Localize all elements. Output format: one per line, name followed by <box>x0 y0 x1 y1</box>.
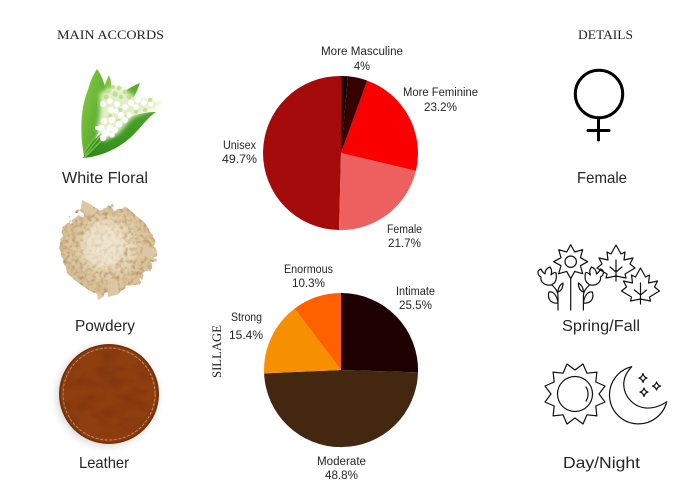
label: strong <box>229 312 263 342</box>
slice: intimate <box>341 293 418 372</box>
label: intimate <box>396 286 435 312</box>
slice: more feminine <box>341 81 418 171</box>
chart: sillage pie <box>264 293 418 447</box>
heading: main accords: MAIN ACCORDS <box>57 27 164 42</box>
label: more masculine <box>321 46 403 73</box>
accord: powdery image <box>60 200 157 300</box>
icon part: lower maple leaf <box>622 268 660 304</box>
label: day/night: Day/Night <box>563 455 641 472</box>
label: more masculine: More Masculine <box>321 46 403 58</box>
label: moderate: Moderate <box>317 456 366 468</box>
slice: female <box>339 153 416 230</box>
label: more masculine: 4% <box>354 61 370 73</box>
slice: strong <box>264 309 341 373</box>
label: white floral: White Floral <box>62 170 148 187</box>
accord: leather image <box>57 344 159 446</box>
axis label: sillage: SILLAGE <box>209 325 224 378</box>
label: intimate: 25.5% <box>399 300 432 312</box>
label: strong: 15.4% <box>229 330 263 342</box>
slice: more masculine <box>341 76 367 153</box>
icon part: sunflower <box>554 245 588 310</box>
label: female: Female <box>577 170 627 187</box>
label: moderate: 48.8% <box>325 470 358 482</box>
label: enormous: 10.3% <box>292 278 325 290</box>
icon part: sun <box>545 364 605 424</box>
slice: moderate <box>264 370 418 447</box>
label: female share <box>387 224 422 250</box>
slice: unisex <box>263 76 341 230</box>
label: female share: 21.7% <box>388 238 421 250</box>
label: leather: Leather <box>79 455 130 472</box>
heading: details: DETAILS <box>578 27 633 42</box>
chart: gender pie <box>263 76 418 230</box>
icon: female symbol <box>575 70 623 140</box>
label: unisex <box>222 140 257 166</box>
label: moderate <box>317 456 366 482</box>
label: more feminine: More Feminine <box>403 87 478 99</box>
accord: white floral image <box>81 69 162 158</box>
icon: flowers and maple leaves <box>538 245 660 310</box>
icon part: upper maple leaf <box>597 245 635 281</box>
label: powdery: Powdery <box>75 318 135 335</box>
slice: male <box>341 76 348 153</box>
label: enormous: Enormous <box>284 264 333 276</box>
label: spring/fall: Spring/Fall <box>562 318 640 335</box>
icon part: right tulip <box>578 267 603 310</box>
slice: enormous <box>295 293 341 370</box>
label: female share: Female <box>387 224 422 236</box>
label: intimate: Intimate <box>396 286 435 298</box>
icon part: crescent moon <box>610 367 667 424</box>
label: unisex: Unisex <box>223 140 256 152</box>
label: more feminine: 23.2% <box>424 102 457 114</box>
label: more feminine <box>403 87 478 114</box>
label: unisex: 49.7% <box>222 154 257 166</box>
label: strong: Strong <box>231 312 262 324</box>
icon: sun and moon <box>545 364 667 424</box>
label: enormous <box>284 264 333 290</box>
icon part: stars <box>639 374 660 396</box>
icon part: left tulip <box>538 267 563 310</box>
